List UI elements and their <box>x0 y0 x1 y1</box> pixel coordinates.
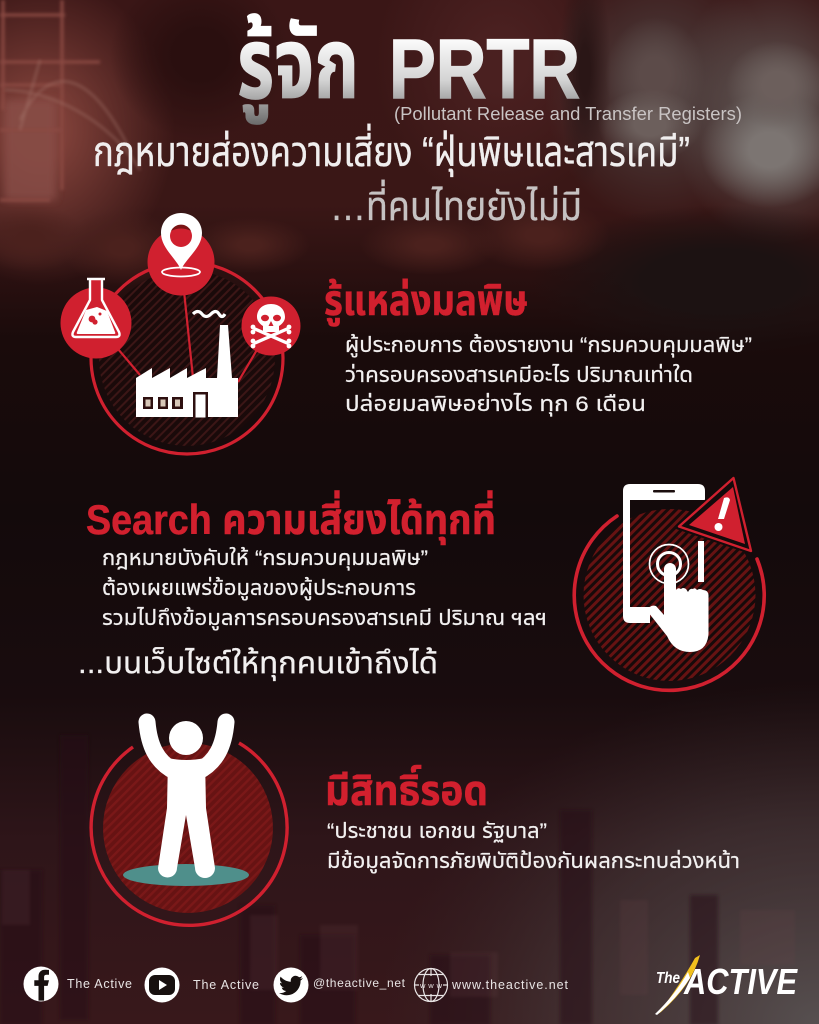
icon: website globe <box>414 968 448 1002</box>
teal ground ellipse <box>123 864 249 886</box>
icon: twitter <box>274 968 308 1002</box>
heading: search risk anywhere: Search ความเสี่ยงได้ทุกที่ <box>86 490 496 545</box>
warning triangle <box>678 477 752 552</box>
label: youtube: The Active <box>193 978 259 992</box>
logo: The Active: The <box>656 970 680 987</box>
figure <box>147 721 226 878</box>
www inside globe: www <box>419 981 443 990</box>
icon: youtube <box>144 968 180 1002</box>
logo: The Active <box>655 955 798 1015</box>
icon: person standing with raised arms <box>91 721 287 925</box>
label: facebook: The Active <box>67 977 132 991</box>
text block: people, private sector, government <box>327 820 740 874</box>
subtitle <box>93 123 690 229</box>
icon: location pin <box>148 213 214 296</box>
logo: The Active: ACTIVE <box>683 961 798 1002</box>
line 1: กฎหมายบังคับให้ “กรมควบคุมมลพิษ” <box>102 546 428 571</box>
callout: on website: ...บนเว็บไซต์ให้ทุกคนเข้าถึงได้ <box>78 647 438 681</box>
subtitle line 2: …ที่คนไทยยังไม่มี <box>330 179 582 229</box>
tap rings <box>650 544 688 584</box>
line 2: ว่าครอบครองสารเคมีอะไร ปริมาณเท่าใด <box>345 363 693 387</box>
line 2: มีข้อมูลจัดการภัยพิบัติป้องกันผลกระทบล่วงหน้า <box>327 849 740 874</box>
label: website: www.theactive.net <box>451 978 569 992</box>
icon: phone tap with warning <box>574 477 764 690</box>
line 3: รวมไปถึงข้อมูลการครอบครองสารเคมี ปริมาณ ฯลฯ <box>102 606 547 631</box>
line 1: “ประชาชน เอกชน รัฐบาล” <box>327 820 547 843</box>
icon: facebook <box>24 966 58 1002</box>
subtitle line 1: กฎหมายส่องความเสี่ยง “ฝุ่นพิษและสารเคมี” <box>93 123 690 177</box>
pointing hand <box>648 563 708 652</box>
title full form: (Pollutant Release and Transfer Registers) <box>394 104 742 124</box>
title <box>237 8 580 124</box>
icon: factory with pollutant sources <box>60 213 300 454</box>
line 2: ต้องเผยแพร่ข้อมูลของผู้ประกอบการ <box>102 576 416 601</box>
line 1: ผู้ประกอบการ ต้องรายงาน “กรมควบคุมมลพิษ” <box>345 333 752 358</box>
icon: skull and crossbones <box>242 296 300 356</box>
footer social bar <box>24 966 569 1002</box>
heading: know pollution sources: รู้แหล่งมลพิษ <box>324 277 528 326</box>
phone <box>623 484 705 623</box>
title: Thai word: รู้จัก <box>237 8 359 124</box>
icon: factory <box>136 312 238 418</box>
heading: right to survive: มีสิทธิ์รอด <box>325 764 488 814</box>
text block: operators must report <box>345 333 752 417</box>
label: twitter: @theactive_net <box>313 976 406 990</box>
icon: flask <box>60 279 132 358</box>
title: PRTR: PRTR <box>389 22 580 116</box>
line 3: ปล่อยมลพิษอย่างไร ทุก 6 เดือน <box>345 392 646 417</box>
text block: law requires disclosure <box>102 546 547 631</box>
